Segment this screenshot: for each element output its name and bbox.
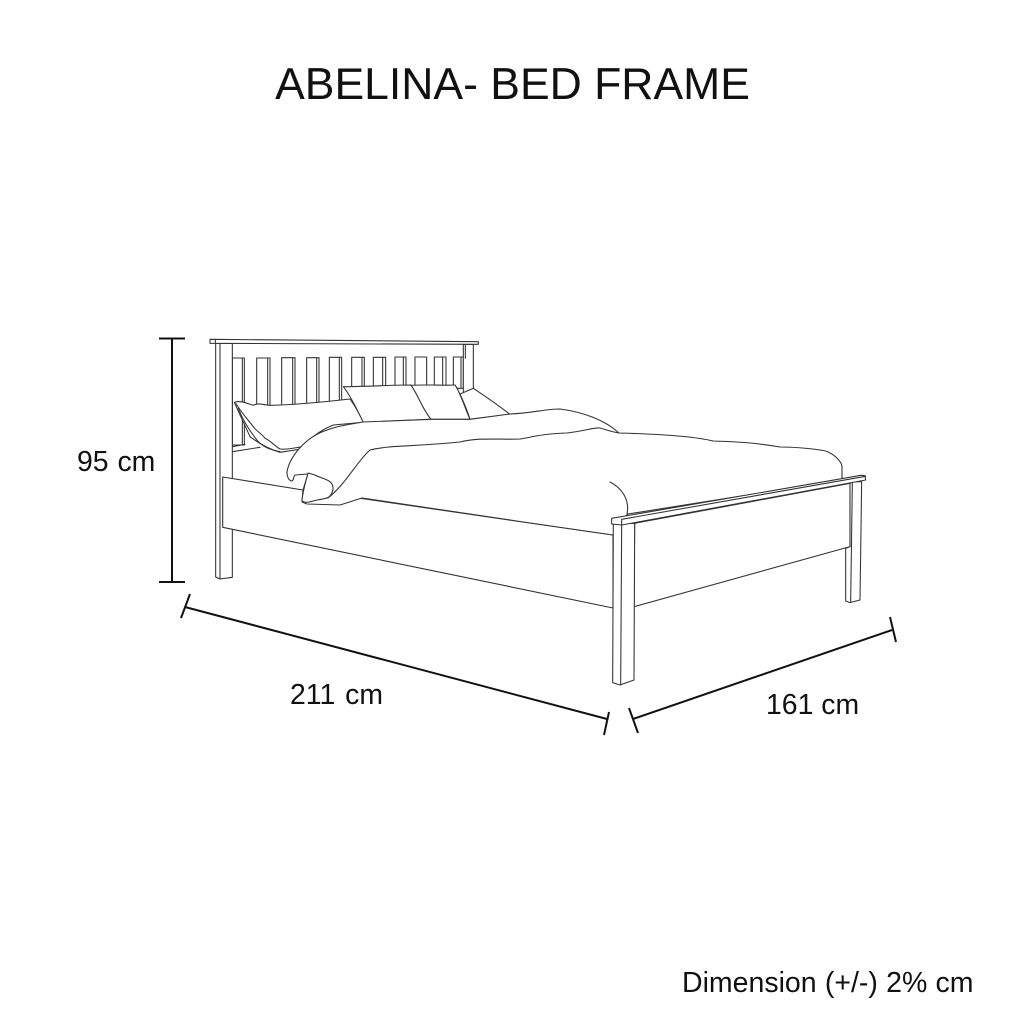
footboard [612,475,866,685]
tolerance note: Dimension (+/-) 2% cm [682,967,974,999]
dimension: width 161 cm [629,617,896,733]
duvet [287,409,842,535]
title: ABELINA- BED FRAME [275,60,750,109]
bed illustration [210,339,866,685]
pillows [234,385,510,452]
dimension: height 95 cm: 95 cm [77,446,155,478]
top rail [612,475,866,525]
headboard slats [232,357,463,445]
near foot post [613,523,635,685]
far foot post [846,482,862,603]
headboard frame [210,339,478,579]
dimension: height 95 cm [77,338,185,582]
dimension: length 211 cm: 211 cm [290,679,383,711]
footboard panel [634,483,850,607]
dimension: length 211 cm [181,594,609,735]
dimension: width 161 cm: 161 cm [766,689,859,721]
side rail [223,477,613,608]
